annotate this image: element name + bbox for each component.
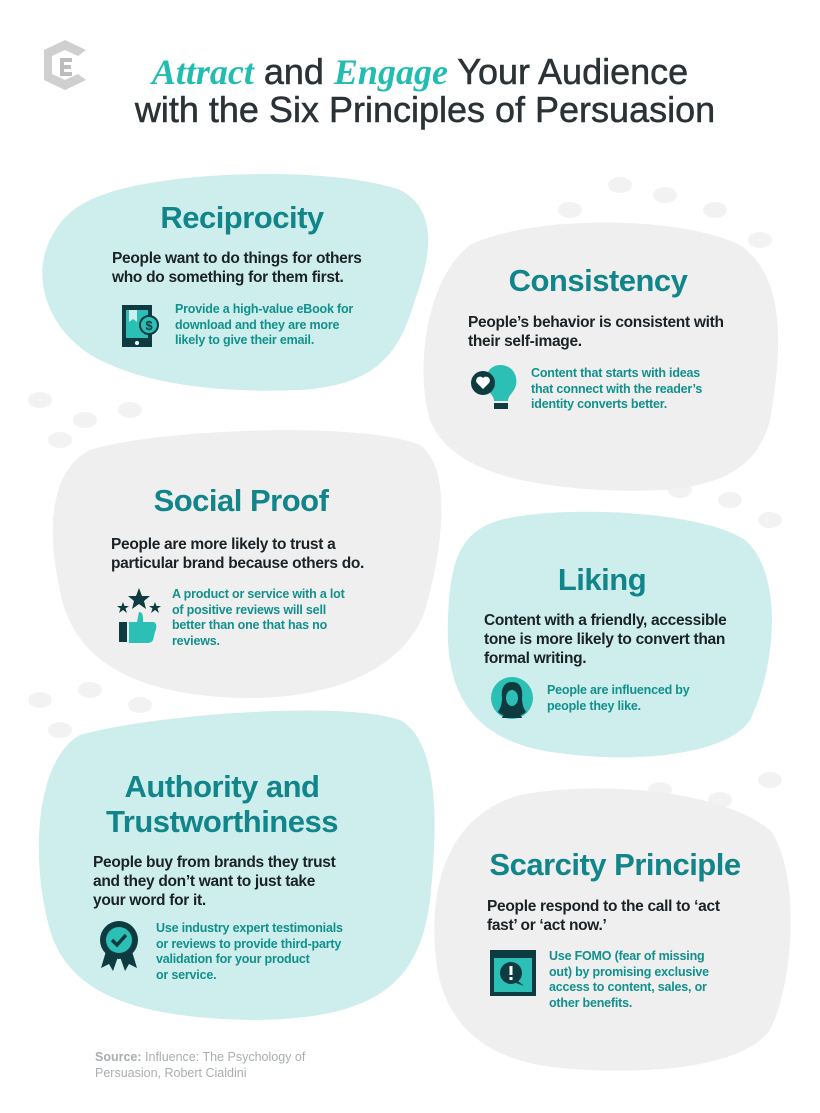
icon: badge check — [100, 921, 138, 971]
icon: ebook tablet — [122, 305, 159, 347]
title: Attract and Engage Your Audience — [152, 51, 688, 92]
text: authority body: and they don’t want to just take — [93, 873, 315, 890]
text: reciprocity body: who do something for them first. — [112, 269, 344, 286]
text: authority example: validation for your product — [156, 952, 310, 966]
text: reciprocity example: download and they are more — [175, 318, 339, 332]
text: scarcity example: out) by promising exclusive — [549, 964, 709, 978]
text: authority example — [156, 921, 343, 982]
text: social proof body: particular brand because others do. — [111, 555, 364, 572]
text: social proof body — [111, 536, 364, 572]
text: reciprocity example: Provide a high-value eBook for — [175, 302, 353, 316]
text: scarcity example — [549, 949, 709, 1010]
icon: thumbs up stars — [117, 588, 161, 643]
title: with the Six Principles of Persuasion — [135, 89, 715, 130]
text: social proof example: A product or service with a lot — [172, 587, 345, 601]
source: Source: Influence: The Psychology of Persuasion, Robert Cialdini — [95, 1050, 305, 1080]
text: reciprocity body: People want to do things for others — [112, 250, 362, 267]
text: social proof example: reviews. — [172, 634, 220, 648]
text: scarcity body — [487, 898, 720, 934]
text: scarcity body: fast’ or ‘act now.’ — [487, 917, 606, 934]
text: social proof example: better than one that has no — [172, 618, 327, 632]
text: liking example: People are influenced by — [547, 683, 689, 697]
heading: Reciprocity: Reciprocity — [160, 200, 324, 235]
text: authority body: your word for it. — [93, 892, 206, 909]
logo — [44, 40, 86, 90]
text: consistency body: People’s behavior is consistent with — [468, 314, 724, 331]
text: reciprocity example: likely to give their email. — [175, 333, 314, 347]
heading: Scarcity Principle: Scarcity Principle — [489, 847, 741, 882]
text: social proof example — [172, 587, 345, 648]
heading: Liking: Liking — [558, 562, 646, 597]
text: consistency body: their self-image. — [468, 333, 582, 350]
text: scarcity body: People respond to the call to ‘act — [487, 898, 720, 915]
text: reciprocity example — [175, 302, 354, 347]
text: authority example: Use industry expert testimonials — [156, 921, 343, 935]
text: social proof example: of positive reviews will sell — [172, 602, 326, 616]
text: scarcity example: Use FOMO (fear of missing — [549, 949, 704, 963]
text: liking body: tone is more likely to convert than — [484, 631, 725, 648]
text: consistency example — [531, 366, 702, 411]
icon: alert window — [490, 950, 536, 996]
text: scarcity example: access to content, sales, or — [549, 980, 707, 994]
text: consistency example: Content that starts with ideas — [531, 366, 700, 380]
text: reciprocity body — [112, 250, 362, 286]
text: liking example: people they like. — [547, 698, 641, 712]
heading: Authority and Trustworthiness: Authority and Trustworthiness — [106, 769, 338, 839]
text: social proof body: People are more likely to trust a — [111, 536, 335, 553]
text: liking body — [484, 612, 726, 667]
text: consistency example: identity converts better. — [531, 397, 667, 411]
heading: Social Proof: Social Proof — [154, 483, 328, 518]
icon: lightbulb heart — [471, 365, 516, 409]
text: authority example: or reviews to provide third-party — [156, 936, 341, 950]
text: authority body — [93, 854, 336, 909]
title — [134, 51, 715, 130]
icon: person — [491, 677, 533, 719]
text: liking example — [547, 683, 690, 712]
text: scarcity example: other benefits. — [549, 996, 632, 1010]
text: consistency body — [468, 314, 724, 350]
text: consistency example: that connect with the reader’s — [531, 382, 702, 396]
text: liking body: formal writing. — [484, 650, 586, 667]
heading: Consistency: Consistency — [509, 263, 687, 298]
text: authority example: or service. — [156, 968, 216, 982]
text: authority body: People buy from brands they trust — [93, 854, 335, 871]
icon: ebook tablet: $ — [145, 318, 153, 333]
text: liking body: Content with a friendly, accessible — [484, 612, 726, 629]
